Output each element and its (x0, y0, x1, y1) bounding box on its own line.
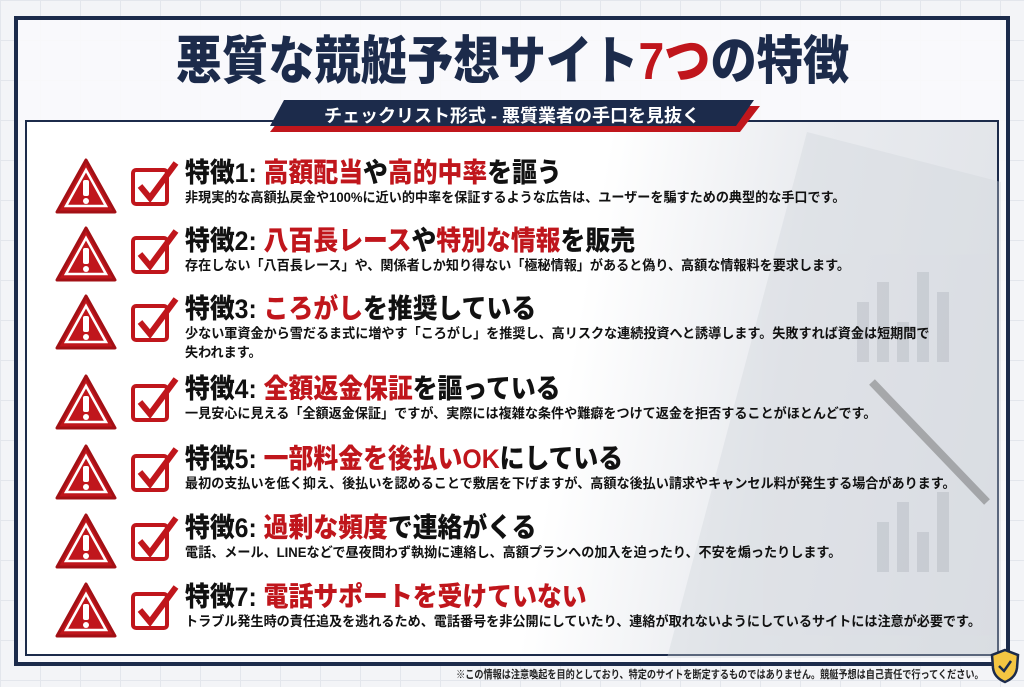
description (185, 326, 929, 360)
icon: warning (56, 374, 117, 430)
icon: checkbox (131, 229, 178, 274)
banner (270, 100, 760, 132)
heading: 特徴6: 過剰な頻度で連絡がくる (185, 513, 536, 543)
row 2 (56, 226, 850, 282)
inner panel (25, 120, 999, 656)
description: 失われます。 (185, 345, 262, 360)
description: 少ない軍資金から雪だるま式に増やす「ころがし」を推奨し、高リスクな連続投資へと誘導します。失敗すれば資金は短期間で (185, 326, 929, 341)
heading: 特徴5: 一部料金を後払いOKにしている (185, 444, 623, 474)
heading: 特徴7: 電話サポートを受けていない (185, 582, 587, 612)
heading: 特徴3: ころがしを推奨している (185, 294, 536, 324)
row 7 (56, 582, 981, 638)
description: トラブル発生時の責任追及を逃れるため、電話番号を非公開にしていたり、連絡が取れないようにしているサイトには注意が必要です。 (185, 614, 981, 629)
description: 一見安心に見える「全額返金保証」ですが、実際には複雑な条件や難癖をつけて返金を拒否することがほとんどです。 (185, 406, 876, 421)
description: 最初の支払いを低く抑え、後払いを認めることで敷居を下げますが、高額な後払い請求やキャンセル料が発生する場合があります。 (185, 476, 956, 491)
row 3 (56, 294, 929, 360)
icon: checkbox (131, 297, 178, 342)
heading: 特徴2: 八百長レースや特別な情報を販売 (185, 226, 635, 256)
icon: checkbox (131, 447, 178, 492)
icon: warning (56, 513, 117, 568)
icon: warning (56, 158, 117, 214)
icon: warning (56, 582, 117, 638)
icon: checkbox (131, 585, 178, 630)
row 5 (56, 444, 956, 500)
footnote: ※この情報は注意喚起を目的としており、特定のサイトを断定するものではありません。競艇予想は自己責任で行ってください。 (456, 669, 984, 681)
description: 存在しない「八百長レース」や、関係者しか知り得ない「極秘情報」があると偽り、高額な情報料を要求します。 (185, 258, 850, 273)
icon: checkbox (131, 516, 178, 561)
row 4 (56, 374, 876, 430)
description: 電話、メール、LINEなどで昼夜問わず執拗に連絡し、高額プランへの加入を迫ったり、不安を煽ったりします。 (185, 545, 841, 560)
description: 非現実的な高額払戻金や100%に近い的中率を保証するような広告は、ユーザーを騙すための典型的な手口です。 (185, 190, 845, 205)
heading: 特徴1: 高額配当や高的中率を謳う (185, 158, 562, 188)
icon: warning (56, 226, 117, 282)
icon: shield (990, 648, 1020, 684)
row 1 (56, 158, 845, 214)
icon: warning (56, 294, 117, 350)
icon: warning (56, 444, 117, 500)
icon: checkbox (131, 161, 178, 206)
icon: checkbox (131, 377, 178, 422)
banner: チェックリスト形式 - 悪質業者の手口を見抜く (324, 106, 700, 126)
row 6 (56, 512, 841, 568)
background photo shapes (667, 132, 1001, 658)
heading: 特徴4: 全額返金保証を謳っている (185, 374, 561, 404)
title: 悪質な競艇予想サイト7つの特徴 (175, 33, 849, 91)
